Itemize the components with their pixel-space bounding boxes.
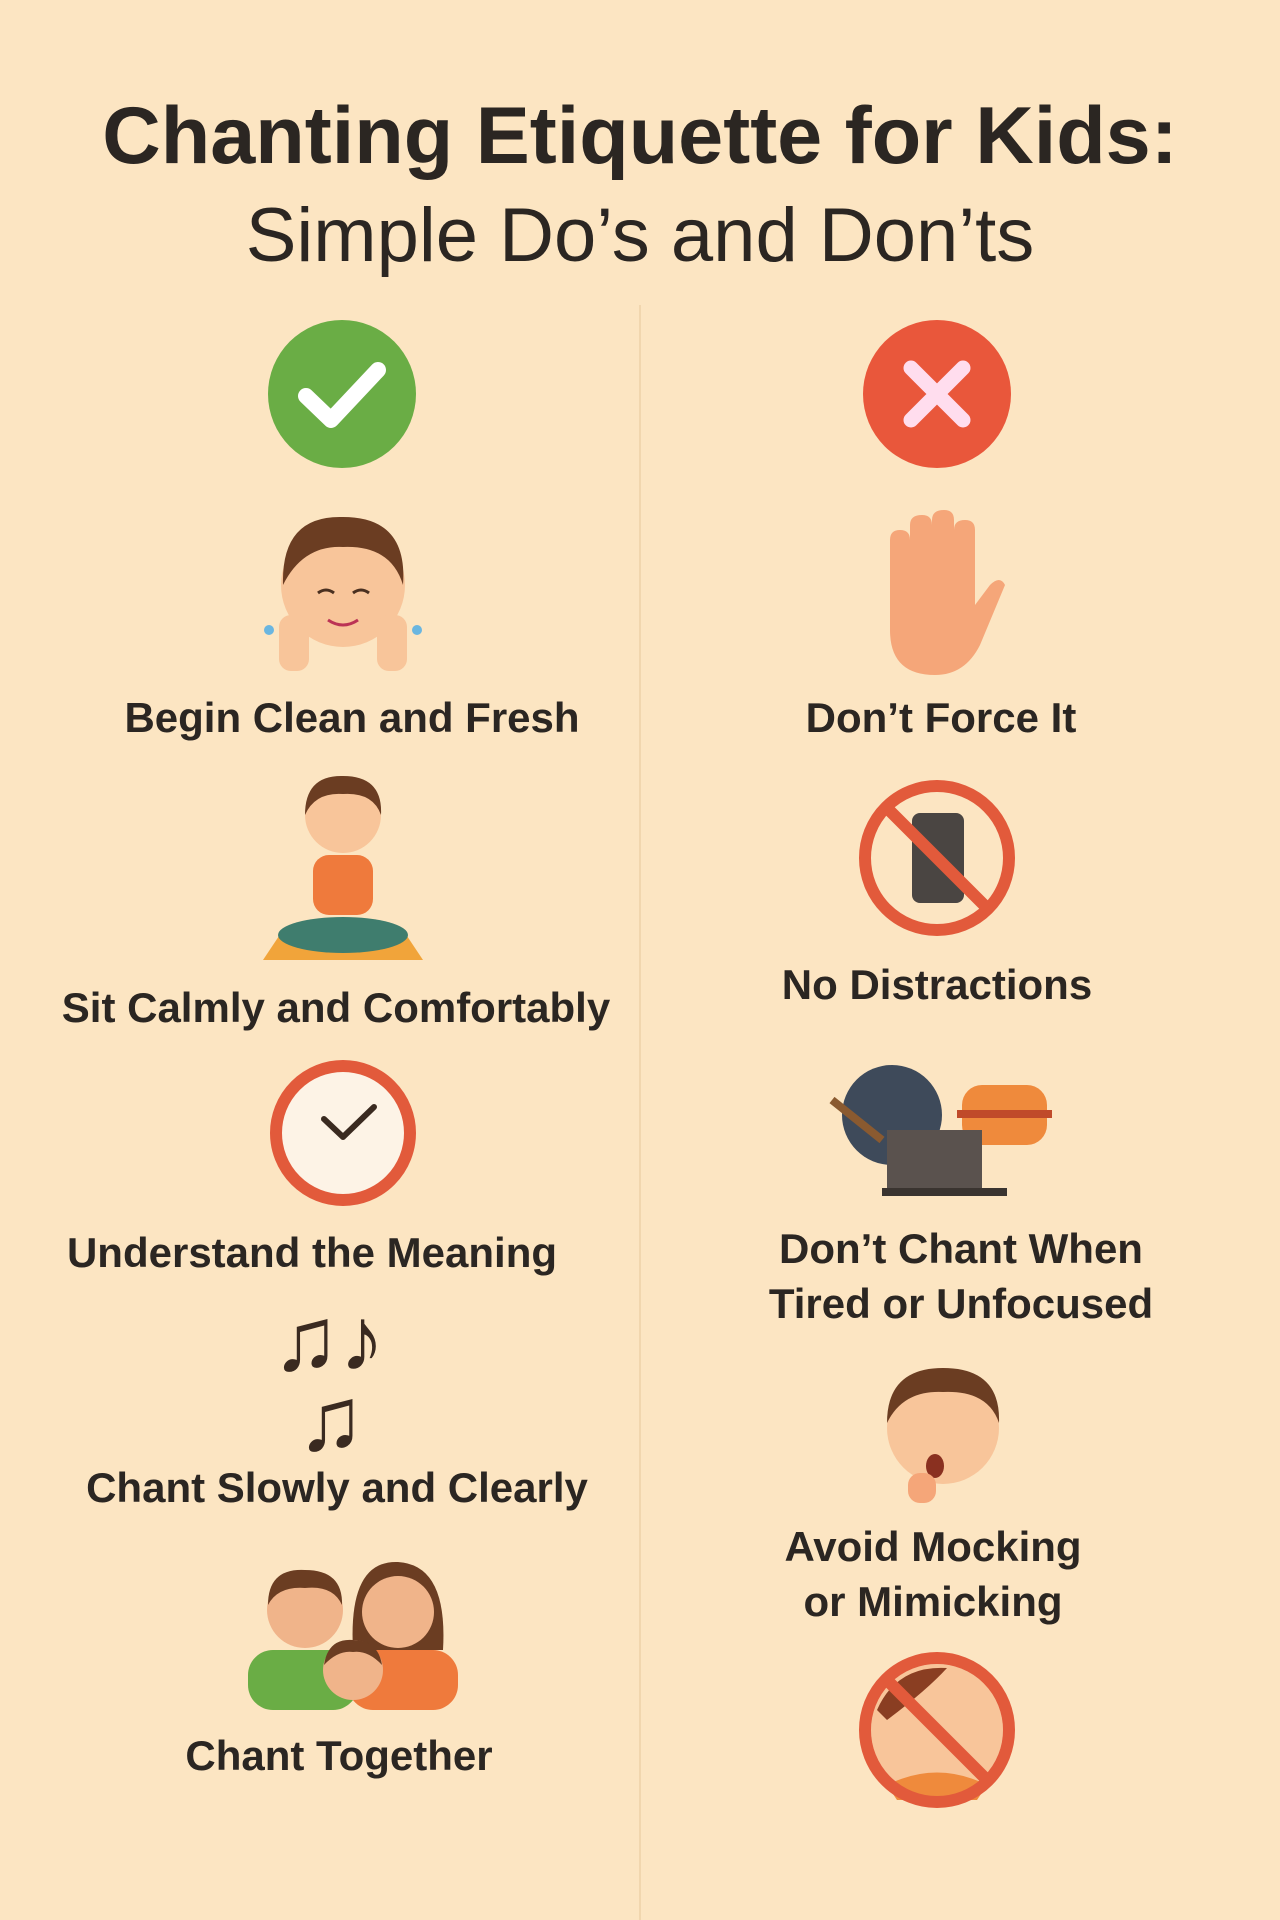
- icon: cross: [863, 320, 1011, 468]
- title: Chanting Etiquette for Kids:: [102, 91, 1178, 181]
- label: no distractions: No Distractions: [782, 961, 1092, 1008]
- icon: clock: [270, 1060, 416, 1206]
- icon: no phone: [859, 780, 1015, 936]
- label: avoid mocking: or Mimicking: [803, 1578, 1063, 1625]
- label: don't force: Don’t Force It: [806, 694, 1076, 741]
- label: avoid mocking: [784, 1523, 1082, 1625]
- icon: no mimic: [859, 1652, 1015, 1808]
- icon: music notes: ♫: [297, 1370, 365, 1470]
- label: chant together: Chant Together: [185, 1732, 493, 1779]
- label: don't chant tired: Don’t Chant When: [779, 1225, 1143, 1272]
- label: sit calmly: Sit Calmly and Comfortably: [62, 984, 610, 1031]
- title: [102, 91, 1178, 278]
- icon: clean face: [264, 517, 422, 671]
- icon: music notes: ♫♪: [272, 1290, 384, 1390]
- icon: yawning face: [887, 1368, 1000, 1503]
- icon: meditating child: [263, 776, 423, 960]
- icon: clutter: [830, 1065, 1052, 1196]
- label: don't chant tired: [769, 1225, 1153, 1327]
- icon: hand: [890, 510, 1005, 675]
- title: Simple Do’s and Don’ts: [246, 193, 1034, 278]
- icon: family: [248, 1562, 458, 1710]
- icon: music notes: [272, 1290, 384, 1470]
- label: chant slowly: Chant Slowly and Clearly: [86, 1464, 588, 1511]
- label: avoid mocking: Avoid Mocking: [784, 1523, 1082, 1570]
- label: don't chant tired: Tired or Unfocused: [769, 1280, 1153, 1327]
- label: understand: Understand the Meaning: [67, 1229, 557, 1276]
- icon: check: [268, 320, 416, 468]
- label: begin clean: Begin Clean and Fresh: [124, 694, 580, 741]
